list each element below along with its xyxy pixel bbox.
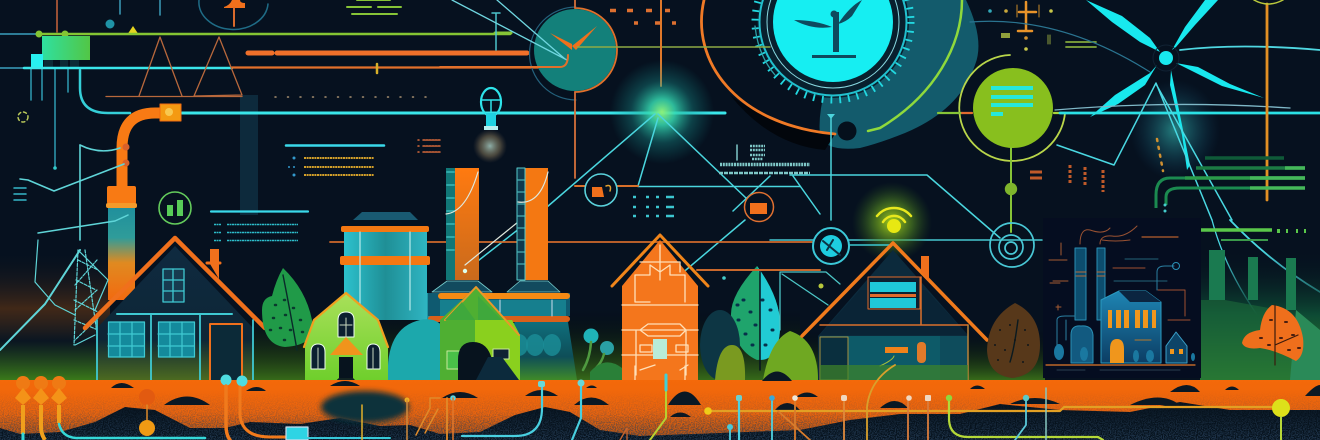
green data bars — [1156, 158, 1306, 240]
teal hump — [388, 319, 450, 380]
icon: turbine node circle — [813, 228, 892, 264]
tree: green dotted — [262, 268, 313, 350]
dotted key grid — [633, 197, 674, 216]
concentric node — [990, 223, 1034, 267]
left trio pipes — [15, 376, 205, 440]
text block: mid-left lines — [14, 140, 440, 200]
orange mast — [1254, 0, 1283, 200]
top-right small marks — [970, 2, 1150, 72]
lower-right node stems — [730, 365, 1103, 440]
power pylon — [0, 145, 128, 350]
house 3 — [802, 243, 987, 380]
orange dial arc — [702, 0, 835, 134]
ball valve — [139, 389, 155, 436]
orange dotted trail — [1157, 139, 1163, 171]
icon: large wind turbine — [1086, 0, 1264, 170]
cyan cap pipes — [220, 374, 447, 440]
yellow bus line — [704, 399, 1290, 440]
small cottage — [1166, 332, 1187, 363]
turbine guy wires — [1055, 46, 1320, 322]
small orange bars chart — [1030, 165, 1103, 192]
network lines from glow — [465, 114, 1042, 275]
central glow — [610, 60, 714, 164]
poster trees — [1054, 344, 1195, 362]
orange vertical circuit lines — [575, 0, 661, 178]
orange stub and small circle icon — [575, 174, 638, 206]
light-bulb icon — [473, 88, 507, 163]
dial detail: small arc and dark knob — [755, 26, 856, 220]
right window — [158, 322, 194, 357]
tower: smoke stack — [106, 186, 137, 300]
door — [210, 324, 242, 380]
orange square node — [744, 192, 774, 222]
small orange code marks — [610, 10, 676, 23]
orange horizontal circuit line — [330, 241, 812, 243]
panel: factory poster — [1043, 218, 1201, 378]
text block: lower-left lines — [211, 212, 308, 240]
icon: turbine in dial — [794, 0, 862, 58]
main building — [1101, 291, 1161, 363]
ground speckle — [0, 392, 1320, 440]
poster line art — [1046, 237, 1195, 370]
chimneys — [1075, 226, 1137, 320]
lime cottage — [304, 293, 388, 385]
lower-right node caps — [727, 395, 1029, 430]
backdrop: house ground fog — [0, 250, 1045, 380]
icon: scale triangles — [106, 37, 242, 96]
big dial backdrop — [730, 0, 978, 150]
turbine glow — [1130, 80, 1220, 180]
text block: top green lines — [347, 0, 401, 14]
backdrop: right green field — [1200, 250, 1320, 380]
factory: chimneys — [446, 168, 548, 280]
clock-like turbine circle — [440, 0, 770, 100]
panel: top-left circuit lines — [0, 0, 566, 170]
ground: orange soil — [0, 380, 1320, 440]
silo — [1071, 326, 1093, 363]
tree: brown dotted — [987, 303, 1040, 378]
lamp bushes — [583, 328, 622, 380]
house 1 — [85, 238, 265, 380]
pipe: cyan line and orange elbow — [122, 104, 725, 186]
left window — [108, 322, 144, 357]
tree: teal dotted — [731, 266, 780, 370]
attic window — [163, 269, 184, 302]
factory: tank — [340, 212, 439, 320]
dial: gear ring — [755, 0, 911, 100]
dark soil patch — [321, 391, 409, 423]
lime info circle — [938, 55, 1066, 232]
mounds in soil — [111, 372, 1320, 417]
green house front — [440, 287, 520, 380]
backdrop soft band — [240, 95, 258, 215]
bushes around tree — [700, 310, 818, 380]
orange blueprint house — [612, 235, 708, 380]
cyan pipes in mid soil — [450, 375, 666, 440]
yellow wifi glow — [852, 182, 932, 262]
dotted row — [275, 96, 432, 98]
top-left gauge arc — [199, 0, 268, 29]
factory: main hall — [428, 281, 577, 380]
icon: green bar chart circle — [159, 192, 191, 224]
orange bars — [248, 13, 527, 53]
platform sketch — [719, 145, 810, 173]
connector lines right of blueprint house — [697, 270, 840, 330]
tree: orange dotted — [1242, 305, 1303, 365]
wind dial lime arc — [868, 0, 962, 131]
